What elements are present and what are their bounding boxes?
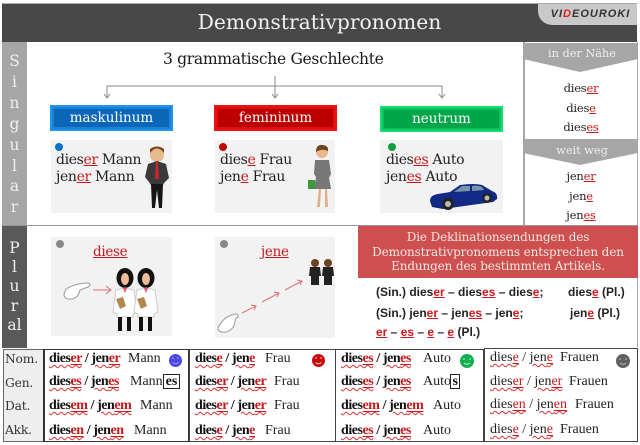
pin: green [388, 143, 396, 151]
singular side label: a [10, 177, 19, 195]
icon: hand and arrows to two distant people [218, 259, 334, 333]
singular side label: u [10, 136, 19, 154]
row: masculine genitive [49, 374, 163, 392]
rule text: (Sin.) dieser – dieses – diese; [376, 285, 543, 299]
table: declension: Mann [130, 374, 163, 389]
table: declension: Frauen [569, 374, 608, 389]
panel: femininum [215, 140, 335, 213]
row: neuter genitive: dieses / jenes [341, 374, 411, 389]
horizontal divider [2, 225, 638, 226]
icon: blue car [430, 184, 498, 210]
right edge line [637, 42, 638, 347]
text: dieser jener Mann: jener Mann [56, 169, 134, 185]
row: plural dative [490, 397, 614, 414]
right column divider [523, 42, 525, 226]
case labels: Akk. [5, 423, 32, 437]
rule text: (Sin.) jener – jenes – jene; [376, 306, 523, 320]
icon: green smiley [460, 354, 474, 368]
pin: red [219, 143, 227, 151]
callout: red explanation: Demonstrativpronomens entsprechen den [372, 244, 624, 258]
row: neuter forms: dieses / jenes [341, 351, 411, 366]
row: masculine accusative [49, 423, 167, 440]
callout: red explanation [358, 226, 638, 278]
table: declension: Frau [274, 374, 300, 389]
list: near pronouns: dieses [563, 120, 599, 134]
panel: maskulinum [51, 140, 172, 213]
list: far pronouns: jene [569, 188, 593, 202]
maskulinum label: maskulinum [70, 110, 153, 126]
table: declension: Auto [423, 374, 451, 389]
row: masculine accusative: diesen / jenen [49, 423, 124, 438]
text: dieses jenes Auto: jenes Auto [386, 169, 457, 185]
row: plural genitive: dieser / jener [490, 374, 562, 389]
genitive ending box: s: s [452, 374, 458, 389]
column: plural [484, 348, 638, 442]
row: neuter genitive [341, 374, 451, 392]
plural side label [2, 226, 27, 348]
list: near pronouns: diese [566, 101, 596, 115]
singular side label: g [10, 115, 19, 133]
row: plural genitive [490, 374, 608, 392]
title bar [2, 3, 637, 42]
neutrum label [380, 106, 503, 132]
row: feminine dative: dieser / jener [195, 398, 266, 413]
row: feminine dative [195, 398, 300, 416]
heading: jene: jene [261, 244, 289, 260]
case labels: Dat. [5, 399, 30, 413]
singular side label: i [12, 73, 17, 91]
row: feminine forms [195, 351, 291, 368]
plural side label: r [11, 297, 18, 315]
row: masculine genitive: dieses / jenes [49, 374, 119, 389]
row: feminine accusative: diese / jene [195, 423, 255, 438]
row: neuter dative [341, 398, 461, 416]
row: plural forms [490, 350, 599, 368]
panel: jene plural [215, 237, 335, 338]
table: declension: Mann [134, 423, 167, 438]
title bar: Demonstrativpronomen [198, 10, 441, 34]
maskulinum label [50, 105, 173, 131]
plural side label: u [10, 277, 19, 295]
pin: grey [220, 240, 228, 248]
singular side label: n [10, 94, 19, 112]
row: masculine forms [49, 351, 161, 368]
logo tab [538, 4, 637, 25]
text: diese jene Frau [218, 152, 292, 185]
plural side label: P [9, 239, 20, 257]
row: neuter dative: diesem / jenem [341, 398, 423, 413]
column: femininum [189, 349, 336, 442]
case labels: Nom. [5, 352, 38, 366]
rule text plural: jene (Pl.) [570, 306, 620, 320]
row: feminine genitive: dieser / jener [195, 374, 266, 389]
table: declension: Auto [423, 423, 451, 438]
genitive ending box: es: es [166, 374, 177, 389]
banner: in der Nähe: in der Nähe [548, 47, 616, 60]
rule text endings: er – es – e – e (Pl.) [376, 325, 480, 339]
text: diese jene Frau: diese Frau [220, 152, 292, 168]
banner: in der Nähe [525, 43, 637, 72]
row: neuter accusative: dieses / jenes [341, 423, 411, 438]
row: plural accusative: diese / jene [490, 422, 553, 437]
list: far pronouns: jenes [566, 208, 596, 222]
row: neuter forms [341, 351, 451, 368]
arrows: gender tree [104, 76, 446, 99]
case labels: Gen. [5, 376, 33, 390]
plural side label: al [7, 316, 22, 334]
text: dieser jener Mann: dieser Mann [56, 152, 141, 168]
table: declension: Frauen [560, 350, 599, 365]
icon: woman [308, 144, 331, 207]
table: declension: Auto [423, 351, 451, 366]
text: dieser jener Mann [54, 152, 142, 185]
singular side label: r [11, 198, 18, 216]
pin: blue [55, 143, 63, 151]
table: declension: Mann [140, 398, 173, 413]
singular side label: S [9, 52, 20, 70]
panel: neutrum [380, 140, 503, 213]
icon: man [145, 146, 169, 208]
row: feminine forms: diese / jene [195, 351, 255, 366]
table: declension: Mann [128, 351, 161, 366]
table: declension: Auto [433, 398, 461, 413]
banner: weit weg: weit weg [556, 144, 608, 157]
row: feminine genitive [195, 374, 300, 392]
row: neuter accusative [341, 423, 451, 440]
logo tab: VIDEOUROKI [551, 8, 630, 20]
singular side label: l [12, 157, 17, 175]
genitive ending box: es [163, 374, 180, 389]
list: near pronouns [563, 81, 599, 134]
neutrum label: neutrum [412, 111, 471, 127]
column: maskulinum [43, 349, 189, 442]
column: neutrum [336, 349, 484, 442]
table: declension: Frau [265, 423, 291, 438]
pin: grey [56, 240, 64, 248]
callout: red explanation: Die Deklinationsendungen des [407, 230, 589, 244]
list: far pronouns: jener [566, 169, 596, 183]
row: masculine dative [49, 398, 173, 416]
row: masculine dative: diesem / jenem [49, 398, 131, 413]
plural side label: l [12, 258, 17, 276]
row: plural forms: diese / jene [490, 350, 553, 365]
banner: weit weg [525, 139, 637, 165]
case label background [3, 349, 43, 442]
femininum label: femininum [239, 110, 312, 126]
icon: blue smiley [169, 354, 182, 367]
femininum label [214, 105, 337, 131]
heading: 3 grammatische Geschlechte: 3 grammatische Geschlechte [163, 50, 384, 68]
row: feminine accusative [195, 423, 291, 440]
row: plural accusative [490, 422, 599, 440]
case labels [4, 352, 38, 437]
icon: red smiley [312, 354, 325, 367]
text: diese jene Frau: jene Frau [220, 169, 285, 185]
text: dieses jenes Auto: dieses Auto [386, 152, 464, 168]
panel: diese plural [51, 237, 172, 336]
table: declension [3, 348, 638, 442]
text: dieses jenes Auto [384, 152, 464, 185]
callout: red explanation: Endungen des bestimmten Artikels. [391, 259, 605, 273]
table: declension: Frau [265, 351, 291, 366]
table: declension: Frau [274, 398, 300, 413]
icon: grey smiley [616, 354, 630, 368]
rule text plural: diese (Pl.) [568, 285, 625, 299]
table: declension: Frauen [575, 397, 614, 412]
list: far pronouns [565, 169, 596, 222]
icon: hand and arrow to two doctors [64, 268, 158, 331]
heading: diese: diese [93, 244, 127, 260]
singular side label [2, 42, 27, 225]
list: near pronouns: dieser [564, 81, 598, 95]
row: plural dative: diesen / jenen [490, 397, 567, 412]
row: masculine forms: dieser / jener [49, 351, 120, 366]
genitive ending box: s [450, 374, 460, 389]
table: declension: Frauen [560, 422, 599, 437]
